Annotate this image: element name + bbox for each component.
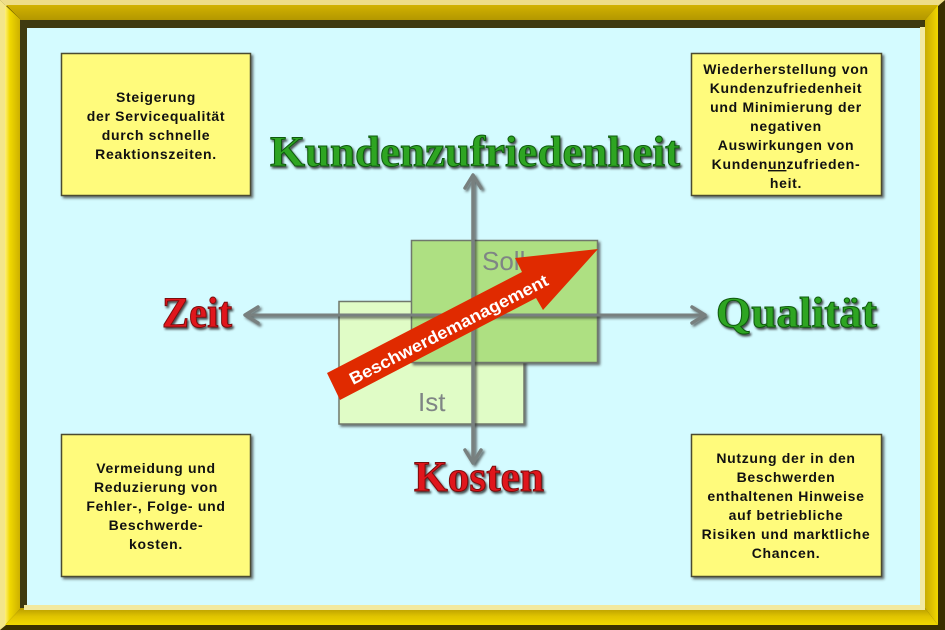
panel: Qualität note: Chancen. <box>752 545 820 561</box>
panel: Kosten note <box>62 434 250 576</box>
panel: Kundenzufriedenheit note: Kundenzufriedenheit <box>710 80 862 96</box>
box: Ist state <box>339 302 524 424</box>
box: Soll state: Soll <box>482 246 525 276</box>
heading: Qualität: Qualität <box>716 290 878 337</box>
panel: Zeit note: Steigerung <box>116 89 196 105</box>
panel: Qualität note: enthaltenen Hinweise <box>707 488 865 504</box>
panel: Qualität note: Nutzung der in den <box>716 450 856 466</box>
panel: Zeit note <box>62 54 250 196</box>
panel: Kosten note: kosten. <box>129 536 183 552</box>
panel: Qualität note: auf betriebliche <box>729 507 843 523</box>
panel: Kosten note: Fehler-, Folge- und <box>86 498 226 514</box>
arrow: Beschwerdemanagement <box>327 249 598 400</box>
panel: Kosten note: Beschwerde- <box>109 517 203 533</box>
panel: Kundenzufriedenheit note: heit. <box>770 175 802 191</box>
panel: Kosten note: Reduzierung von <box>94 479 218 495</box>
panel: Kundenzufriedenheit note: Kundenunzufrieden- <box>712 156 860 172</box>
panel: Kundenzufriedenheit note: negativen <box>750 118 822 134</box>
box: Soll state <box>412 240 598 362</box>
panel: Kosten note: Vermeidung und <box>96 460 216 476</box>
panel: Qualität note: Risiken und marktliche <box>702 526 870 542</box>
axes: four-way arrows <box>245 175 705 463</box>
panel: Zeit note: der Servicequalität <box>87 108 225 124</box>
heading: Kosten: Kosten <box>414 454 544 501</box>
panel: Kundenzufriedenheit note: Wiederherstellung von <box>703 61 869 77</box>
panel: Qualität note: Beschwerden <box>737 469 835 485</box>
box: Ist state: Ist <box>418 387 446 417</box>
panel: Kundenzufriedenheit note <box>692 54 882 196</box>
panel: Kundenzufriedenheit note: und Minimierung der <box>710 99 862 115</box>
panel: Kundenzufriedenheit note: Auswirkungen von <box>718 137 854 153</box>
heading: Kundenzufriedenheit: Kundenzufriedenheit <box>270 129 681 176</box>
heading: Zeit: Zeit <box>162 290 233 337</box>
panel: Zeit note: durch schnelle <box>102 127 210 143</box>
panel: Qualität note <box>692 434 882 576</box>
arrow: Beschwerdemanagement: Beschwerdemanagement <box>346 271 552 389</box>
panel: Zeit note: Reaktionszeiten. <box>95 146 217 162</box>
